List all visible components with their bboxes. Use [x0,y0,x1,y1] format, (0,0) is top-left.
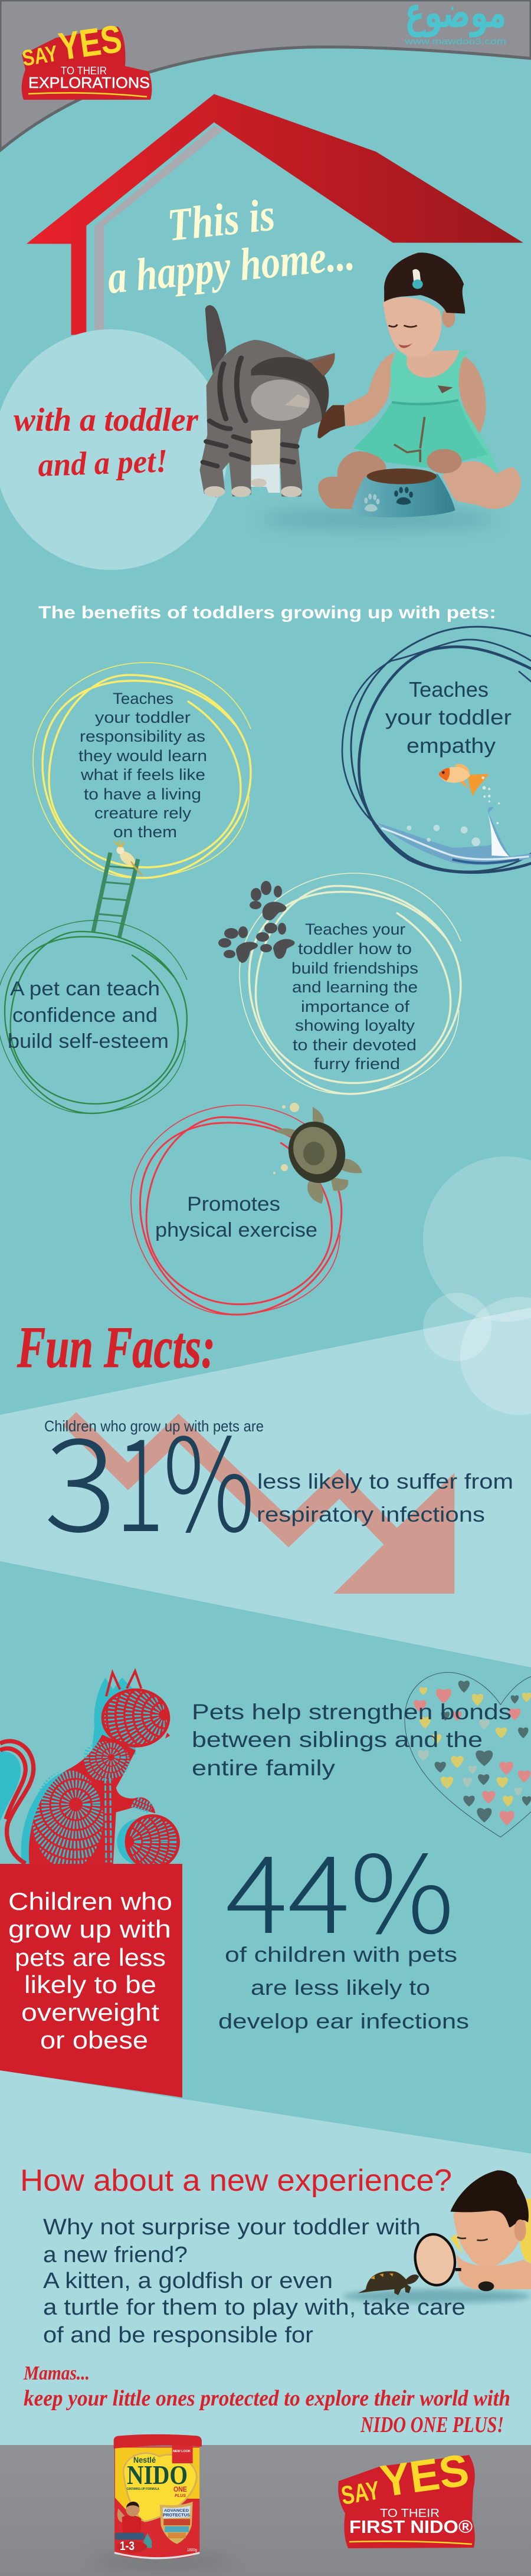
house roof and walls [27,94,523,335]
panel: confidence: build self-esteem [8,1030,169,1053]
caption: with a toddler and a pet [14,402,199,484]
logo: say yes to their explorations [21,17,152,100]
panel: responsibility: responsibility as [80,727,205,745]
heading: fun facts: Fun Facts: [17,1315,215,1380]
chart: falling arrow [63,1412,454,1594]
illustration: toddler with bowl [317,253,521,517]
text: why not surprise: Why not surprise your toddler with [43,2215,421,2240]
icon: bird [114,840,142,876]
stat: 44 percent: 44% [225,1809,454,1964]
callout: red box overweight: grow up with [8,1915,171,1943]
panel: friendships: build friendships [291,959,418,977]
panel: physical exercise: physical exercise [155,1219,317,1241]
text: why not surprise [43,2215,466,2348]
panel: responsibility: Teaches [113,690,173,707]
light band: new experience [0,2070,531,2445]
callout: red box overweight [0,1864,182,2097]
illustration: cat [199,305,335,497]
logo: say yes to their first nido [338,2445,475,2548]
text: siblings: between siblings and the [192,1728,483,1752]
stat: 31 percent: Children who grow up with pets are [44,1417,264,1435]
icon: turtle [273,1103,362,1204]
product: nido can: Nestlé [133,2455,156,2464]
stat: 31 percent: 3 [44,1382,117,1568]
watermark logo: mawdoo3: www.mawdoo3.com [404,37,506,47]
caption: with a toddler and a pet: with a toddler [14,402,199,438]
callout: mamas [23,2362,510,2437]
icon: ladder [93,853,138,938]
logo: say yes to their first nido: YES [378,2445,472,2507]
icon: heart of paw prints [405,1672,531,1837]
product: nido can: PLUS [175,2494,186,2498]
panel: physical exercise: Promotes [187,1193,280,1215]
panel: friendships [240,873,461,1094]
text: why not surprise: a new friend? [43,2243,188,2267]
product: nido can [91,2434,233,2567]
product: nido can: 1800g [187,2548,197,2552]
caption: with a toddler and a pet: and a pet! [37,443,168,484]
stat: 31 percent: less likely to suffer from [257,1469,513,1493]
stat: 44 percent: of children with pets [225,1942,457,1967]
stat: 31 percent: respiratory infections [257,1502,485,1526]
panel: responsibility: to have a living [84,785,201,803]
stat: 44 percent: develop ear infections [218,2009,469,2033]
callout: red box overweight: pets are less [15,1944,166,1971]
stat: 31 percent: % [163,1382,255,1568]
logo: say yes to their explorations: TO THEIR [61,65,107,77]
icon: paw prints [218,881,295,963]
panel: responsibility: what if feels like [80,766,205,784]
panel: responsibility: on them [113,823,177,841]
stat: 44 percent [218,1809,469,2033]
panel: physical exercise [131,1105,342,1315]
stat: 31 percent: 1 [116,1382,164,1568]
panel: friendships: and learning the [292,978,418,996]
icon: goldfish [438,764,500,824]
product: nido can: GROWING-UP FORMULA [127,2487,159,2491]
callout: red box overweight: Children who [8,1887,172,1915]
logo: say yes to their explorations: SAY [21,41,60,71]
panel: empathy: empathy [407,733,496,758]
watermark logo: mawdoo3 [404,0,506,47]
panel: friendships: showing loyalty [295,1017,415,1034]
callout: red box overweight: overweight [21,1998,159,2026]
logo: say yes to their first nido: FIRST NIDO® [349,2516,473,2537]
icon: water splash [378,807,531,865]
light circle behind caption [0,329,228,570]
panel: friendships: furry friend [314,1055,400,1073]
panel: friendships: toddler how to [298,940,412,958]
callout: red box overweight: likely to be [24,1971,156,1998]
text: siblings: entire family [192,1756,336,1780]
text: why not surprise: a turtle for them to play with, take care [43,2295,466,2320]
heading: this is a happy home [105,188,357,303]
panel: responsibility [33,663,251,878]
panel: responsibility: they would learn [78,747,207,765]
light band: fact one [0,1307,531,1667]
panel: friendships: importance of [301,998,410,1015]
panel: empathy: Teaches [409,677,489,702]
panel: confidence: confidence and [12,1004,158,1027]
heading: this is a happy home: This is [165,188,277,251]
text: siblings: Pets help strengthen bonds [192,1700,512,1724]
panel: confidence [0,920,187,1113]
panel: confidence: A pet can teach [10,978,160,1000]
panel: friendships: to their devoted [293,1036,417,1054]
product: nido can: 1-3 [120,2539,135,2553]
product: nido can: NEW LOOK [173,2450,191,2453]
product: nido can: NIDO [127,2460,188,2490]
panel: responsibility: your toddler [95,709,191,726]
callout: red box overweight: or obese [40,2026,148,2054]
text: siblings [192,1700,512,1780]
heading: benefits: The benefits of toddlers growing up with pets: [38,603,496,622]
product: nido can: PROTECTUS [163,2513,190,2518]
stat: 44 percent: are less likely to [251,1975,430,2000]
panel: friendships: Teaches your [305,920,405,938]
bottom grey banner [0,2445,531,2576]
logo: say yes to their explorations: YES [56,17,124,68]
decorative bubbles [423,1156,531,1415]
heading: this is a happy home: a happy home... [105,228,357,303]
illustration: boy with magnifier and turtle [342,2170,531,2303]
panel: empathy: your toddler [385,705,512,729]
heading: new experience: How about a new experience? [20,2164,452,2198]
callout: mamas: Mamas... [23,2362,90,2384]
product: nido can: ADVANCED [164,2509,189,2513]
illustration: cat and toddler floor shadow [260,510,496,529]
product: nido can: ONE [173,2485,187,2493]
logo: say yes to their first nido: SAY [339,2476,382,2511]
text: why not surprise: of and be responsible for [43,2323,313,2348]
panel: responsibility: creature rely [94,804,192,822]
icon: red patterned cat [0,1668,180,1864]
text: why not surprise: A kitten, a goldfish or even [43,2269,333,2293]
stat: 31 percent [44,1382,513,1568]
top grey banner [0,0,531,150]
logo: say yes to their first nido: TO THEIR [380,2507,440,2520]
logo: say yes to their explorations: EXPLORATIONS [28,74,150,91]
panel: empathy [342,627,531,873]
